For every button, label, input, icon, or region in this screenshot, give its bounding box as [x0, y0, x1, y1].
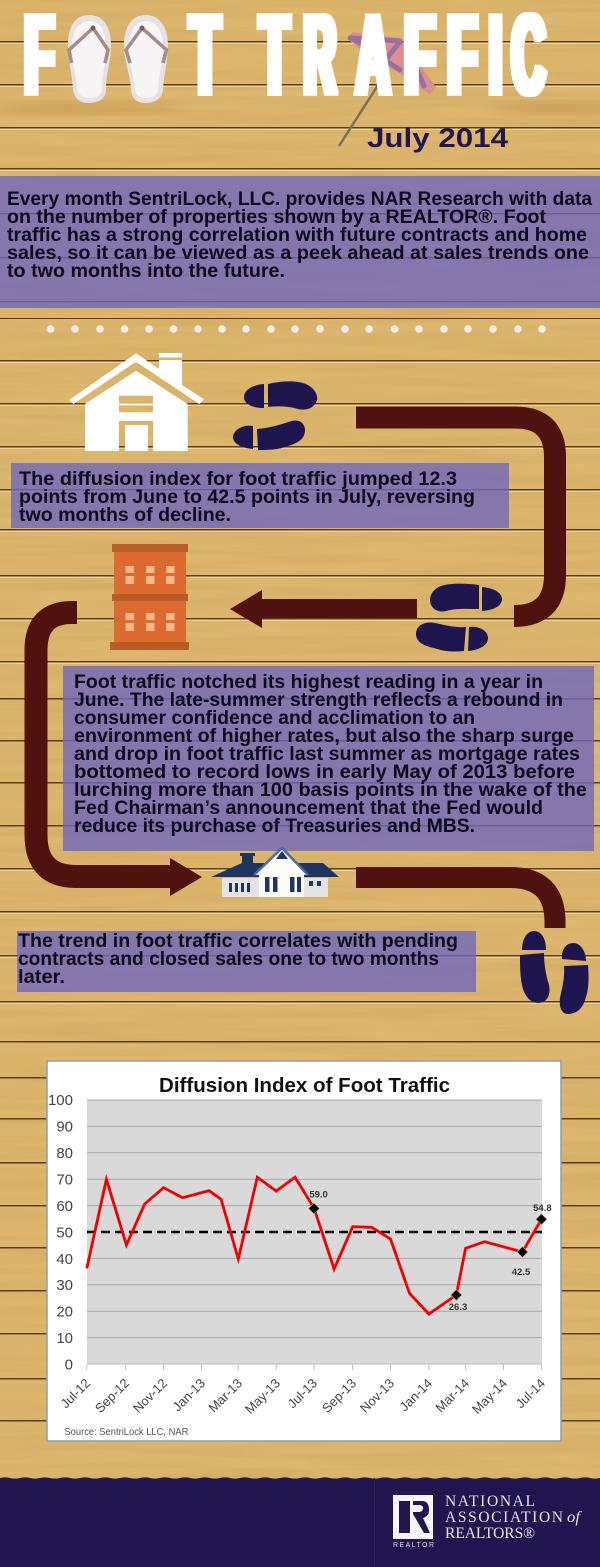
icon: white house [69, 353, 204, 451]
icon: navy roofed house [211, 847, 339, 897]
panel: intro text: on the number of properties shown by a REALTOR®. Foot [7, 207, 547, 228]
x axis labels: Mar-14 [432, 1376, 472, 1415]
x axis labels: Mar-13 [205, 1376, 245, 1415]
panel: intro text [0, 176, 600, 308]
logo: REALTOR block R [393, 1495, 434, 1549]
y axis labels: 90 [56, 1118, 73, 1136]
icon: footprints, third pair [520, 931, 589, 1014]
organisation name: REALTORS® [445, 1525, 535, 1542]
icon: orange apartment building [110, 544, 189, 650]
arrow: footprints to building [230, 590, 417, 628]
plot area with gridlines [87, 1100, 542, 1370]
panel: foot traffic analysis text: reduce its purchase of Treasuries and MBS. [74, 816, 475, 837]
y axis labels: 70 [56, 1172, 73, 1188]
panel: trend text [17, 931, 476, 992]
y axis labels: 80 [56, 1145, 73, 1162]
x axis labels: Jan-14 [396, 1376, 435, 1414]
x axis labels: Jul-12 [57, 1376, 93, 1411]
x axis labels: Nov-12 [130, 1376, 170, 1416]
y axis labels: 30 [56, 1277, 73, 1294]
panel: foot traffic analysis text [63, 666, 594, 851]
x axis labels: Jul-13 [284, 1376, 320, 1411]
y axis labels: 10 [56, 1330, 73, 1347]
organisation name: NATIONAL [445, 1493, 535, 1510]
icon: right flip flop [124, 15, 168, 103]
panel: foot traffic analysis text: environment of higher rates, but also the sharp surge [74, 726, 574, 747]
x axis labels: May-14 [469, 1376, 510, 1417]
data labels: 26.3 [449, 1302, 467, 1313]
x axis labels: Sep-13 [319, 1376, 359, 1416]
panel: trend text: contracts and closed sales one to two months [18, 949, 439, 970]
panel: intro text: sales, so it can be viewed as a peek ahead at sales trends one [7, 243, 589, 264]
data labels: 54.8 [533, 1203, 552, 1214]
y axis labels: 0 [65, 1356, 73, 1374]
arrow: building around to lower house [36, 612, 202, 896]
y axis labels: 50 [56, 1224, 73, 1242]
reference line at 50 [87, 1231, 542, 1233]
x axis labels [57, 1376, 548, 1417]
panel: foot traffic analysis text: bottomed to record lows in early May of 2013 before [74, 762, 575, 783]
organisation name: of [567, 1509, 583, 1526]
x axis labels: Jan-13 [169, 1376, 208, 1414]
date: July 2014: July 2014 [367, 123, 508, 153]
panel: foot traffic analysis text: Foot traffic notched its highest reading in a year in [74, 672, 543, 693]
data labels [309, 1190, 552, 1313]
y axis labels: 60 [56, 1198, 73, 1215]
organisation name: ASSOCIATION [445, 1509, 563, 1526]
highlighted data points [308, 1203, 547, 1300]
panel: trend text: later. [18, 967, 65, 988]
y axis labels [48, 1092, 73, 1374]
panel: intro text: Every month SentriLock, LLC. provides NAR Research with data [7, 189, 592, 210]
panel: diffusion index text: points from June to 42.5 points in July, reversing [19, 487, 475, 508]
y axis labels: 100 [48, 1092, 73, 1109]
icon: footprints, second pair [416, 584, 502, 652]
chart title: Diffusion Index of Foot Traffic [159, 1075, 450, 1097]
footer band [0, 1477, 600, 1567]
y axis labels: 40 [56, 1251, 73, 1268]
x axis labels: May-13 [242, 1376, 283, 1417]
panel: foot traffic analysis text: consumer confidence and acclimation to an [74, 708, 475, 729]
panel: foot traffic analysis text: lurching more than 100 basis points in the wake of the [74, 780, 587, 801]
data labels: 42.5 [512, 1267, 531, 1278]
arrow: house to second footprints [356, 418, 555, 616]
chart: Diffusion Index of Foot Traffic [47, 1061, 561, 1441]
panel: foot traffic analysis text: June. The late-summer strength reflects a rebound in [74, 690, 563, 711]
data labels: 59.0 [309, 1190, 328, 1201]
panel: intro text: traffic has a strong correlation with future contracts and home [7, 225, 587, 246]
title [25, 0, 545, 119]
panel: diffusion index text: two months of decline. [19, 505, 231, 526]
panel: diffusion index text [11, 463, 509, 528]
panel: diffusion index text: The diffusion index for foot traffic jumped 12.3 [19, 469, 457, 490]
organisation name [445, 1493, 583, 1542]
red data line [87, 1177, 541, 1314]
chart source: Source: SentriLock LLC, NAR [64, 1427, 188, 1438]
logo: REALTOR block R: REALTOR [393, 1542, 434, 1549]
dotted divider [47, 325, 546, 333]
panel: intro text: to two months into the future. [7, 261, 285, 282]
icon: beach umbrella [339, 32, 436, 146]
panel: foot traffic analysis text: Fed Chairman’s announcement that the Fed would [74, 798, 543, 819]
arrow: lower house to third footprints [356, 878, 555, 928]
x axis labels: Nov-13 [357, 1376, 397, 1416]
panel: foot traffic analysis text: and drop in foot traffic last summer as mortgage rates [74, 744, 580, 765]
icon: left flip flop [68, 15, 111, 103]
y axis labels: 20 [56, 1304, 73, 1320]
x axis labels: Sep-12 [92, 1376, 132, 1416]
x axis labels: Jul-14 [512, 1376, 548, 1411]
panel: trend text: The trend in foot traffic correlates with pending [18, 931, 458, 952]
icon: footprints, first pair [233, 381, 317, 450]
